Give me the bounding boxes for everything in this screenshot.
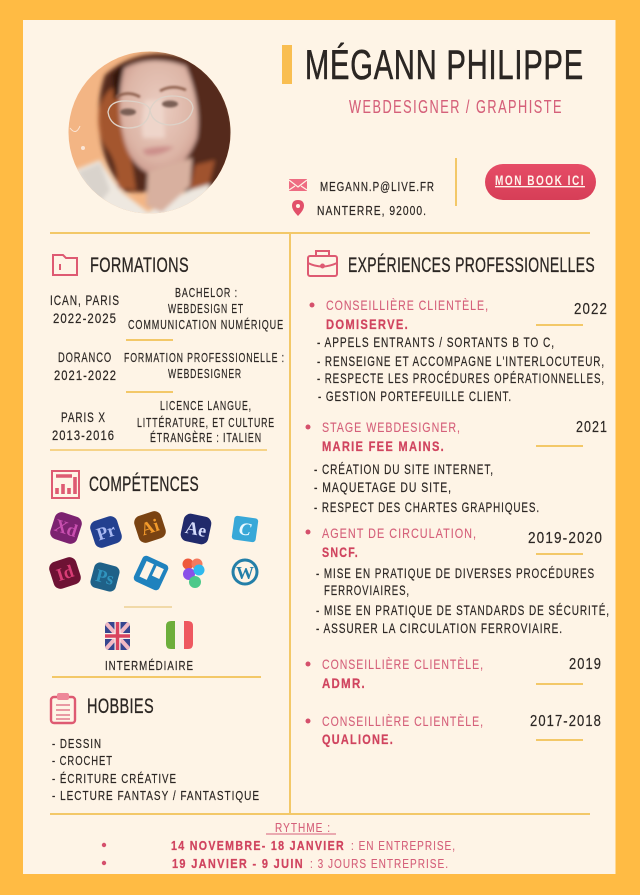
entry: Doranco: 2021-2022 [54, 367, 117, 383]
profile photo [66, 51, 234, 222]
panel: compétences [47, 471, 259, 673]
job: Domiserve: 2022 [574, 301, 608, 318]
entry: ICAN: ICAN, PARIS [50, 292, 120, 308]
job: Marie Fee Mains [306, 419, 608, 515]
job: Domiserve: - APPELS ENTRANTS / SORTANTS B TO C, [317, 334, 555, 350]
icon: Illustrator: Ai [138, 515, 162, 539]
job: Marie Fee Mains: - RESPECT DES CHARTES GRAPHIQUES. [314, 499, 540, 515]
job: SNCF: AGENT DE CIRCULATION, [322, 525, 477, 541]
hobbies list: - CROCHET [52, 753, 113, 768]
heading: hobbies: HOBBIES [87, 695, 154, 718]
footer heading: RYTHME : [275, 820, 331, 835]
icon: Illustrator [132, 509, 168, 545]
icon: UK flag [105, 622, 130, 650]
hobbies list: - DESSIN [52, 736, 102, 751]
entry: ICAN [50, 285, 284, 332]
job: Domiserve: CONSEILLIÈRE CLIENTÈLE, [326, 297, 489, 313]
icon: Photoshop [89, 561, 121, 593]
hobbies list: - LECTURE FANTASY / FANTASTIQUE [52, 788, 260, 803]
icon: clipboard [51, 693, 75, 723]
portfolio button: MON BOOK ICI [495, 173, 585, 188]
hobbies list [52, 736, 260, 803]
address: NANTERRE, 92000. [317, 203, 427, 218]
job: ADMR: 2019 [569, 656, 602, 673]
header [66, 41, 596, 222]
portfolio button [485, 164, 596, 200]
entry: Paris X: ÉTRANGÈRE : ITALIEN [150, 430, 262, 445]
icon: envelope [289, 179, 307, 191]
job: ADMR [306, 656, 602, 691]
icon: After Effects: Ae [184, 517, 208, 541]
entry: Paris X: LITTÉRATURE, ET CULTURE [137, 415, 275, 430]
job: Marie Fee Mains: STAGE WEBDESIGNER, [322, 419, 461, 435]
heading: formations: FORMATIONS [90, 254, 189, 277]
entry: Doranco: FORMATION PROFESSIONELLE : [124, 350, 285, 365]
job: Qualione: QUALIONE. [322, 731, 394, 747]
email: MEGANN.P@LIVE.FR [320, 179, 435, 194]
icon: InDesign [47, 555, 83, 591]
language level: INTERMÉDIAIRE [105, 658, 194, 673]
icon: Canva [231, 515, 259, 543]
entry: ICAN: COMMUNICATION NUMÉRIQUE [128, 317, 284, 332]
entry: Paris X: LICENCE LANGUE, [160, 398, 252, 413]
job: Domiserve: DOMISERVE. [326, 316, 409, 332]
entry: Paris X [52, 398, 275, 445]
rhythm line 1: 14 NOVEMBRE- 18 JANVIER [171, 838, 345, 853]
entry: Doranco [54, 349, 285, 383]
panel: formations [50, 254, 285, 445]
job: Domiserve: - GESTION PORTEFEUILLE CLIENT. [318, 388, 512, 404]
entry: Doranco: WEBDESIGNER [168, 366, 242, 381]
entry: ICAN: WEBDESIGN ET [168, 301, 244, 316]
job: Qualione [306, 713, 602, 747]
rhythm line 2 [102, 856, 449, 871]
icon: Figma [182, 558, 204, 588]
rhythm line 1 [102, 838, 456, 853]
job: SNCF: 2019-2020 [528, 530, 603, 547]
icon: Photoshop: Ps [94, 565, 116, 589]
icon: Premiere: Pr [94, 520, 118, 544]
icon: Canva: C [238, 518, 253, 540]
entry: ICAN: BACHELOR : [175, 285, 238, 300]
job: Qualione: 2017-2018 [530, 713, 602, 730]
entry: Paris X: PARIS X [61, 409, 106, 425]
entry: ICAN: 2022-2025 [53, 310, 117, 326]
icon: Premiere [88, 514, 124, 550]
rhythm line 2: : 3 JOURS ENTREPRISE. [310, 856, 449, 871]
icon: After Effects [179, 512, 213, 546]
job: Qualione: CONSEILLIÈRE CLIENTÈLE, [322, 713, 484, 729]
icon: Adobe XD [48, 510, 84, 546]
icon: location pin [292, 200, 304, 216]
entry: Paris X: 2013-2016 [52, 427, 115, 443]
footer: rythme [102, 820, 456, 871]
entry: Doranco: DORANCO [58, 349, 112, 365]
panel: hobbies [51, 693, 260, 803]
icon: Trello [132, 554, 170, 592]
job: Marie Fee Mains: 2021 [576, 419, 608, 436]
job: SNCF: FERROVIAIRES, [324, 582, 410, 598]
job: SNCF [306, 525, 610, 636]
job: Marie Fee Mains: - MAQUETAGE DU SITE, [314, 479, 452, 495]
rhythm line 2: 19 JANVIER - 9 JUIN [172, 856, 304, 871]
rhythm line 1: : EN ENTREPRISE, [351, 838, 456, 853]
job: Marie Fee Mains: MARIE FEE MAINS. [322, 438, 445, 454]
icon: InDesign: Id [54, 561, 76, 585]
job: Domiserve [310, 297, 608, 404]
icon: WordPress [232, 558, 258, 586]
job: Marie Fee Mains: - CRÉATION DU SITE INTERNET, [314, 461, 494, 477]
icon: WordPress: W [236, 563, 254, 583]
heading: compétences: COMPÉTENCES [89, 473, 199, 496]
icon: Italy flag [166, 621, 193, 649]
job: SNCF: SNCF. [322, 544, 359, 560]
icon: bar chart [52, 471, 79, 498]
job: ADMR: ADMR. [322, 675, 366, 691]
hobbies list: - ÉCRITURE CRÉATIVE [52, 771, 177, 786]
job: ADMR: CONSEILLIÈRE CLIENTÈLE, [322, 656, 484, 672]
icon: Adobe XD: Xd [52, 515, 80, 541]
icon: folder [53, 255, 77, 275]
name accent bar [282, 45, 292, 84]
panel: expériences professionnelles [306, 251, 610, 747]
icon: briefcase [308, 251, 337, 276]
